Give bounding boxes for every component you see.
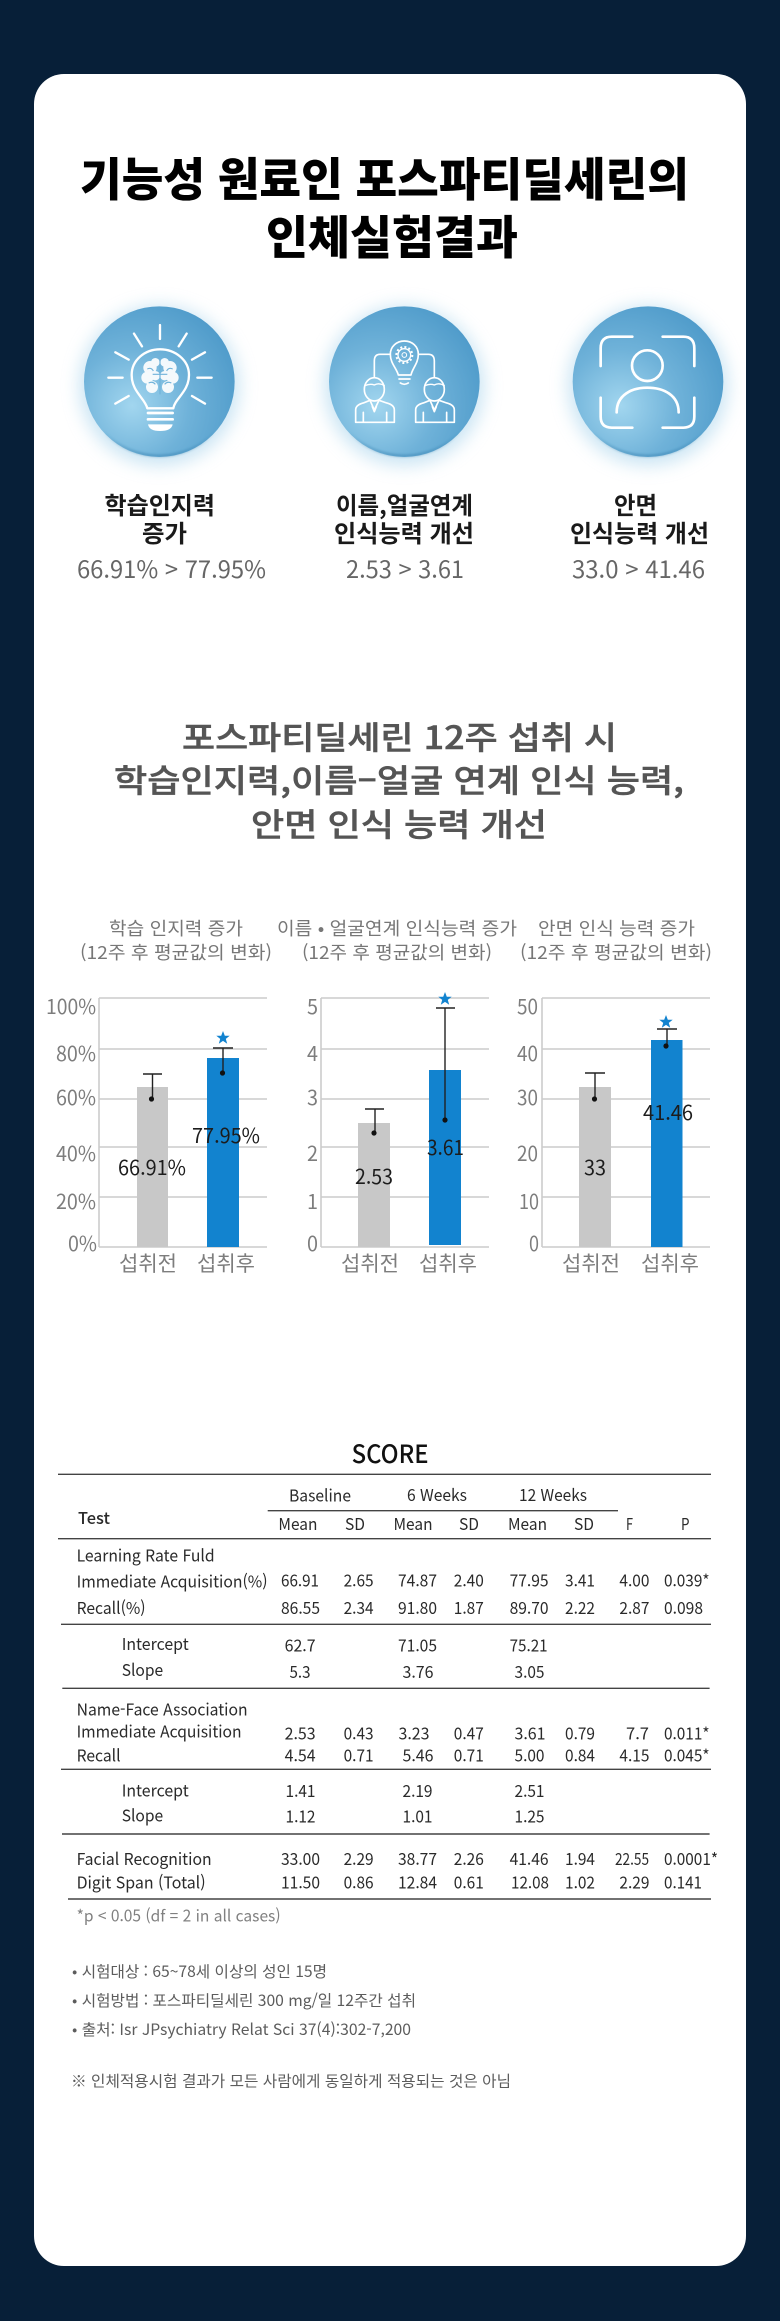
section: name-face association: 0.71 [454,1743,484,1767]
y axis labels [517,990,539,1257]
y axis labels: 20% [56,1185,96,1215]
chart caption: 학습 인지력 증가 [109,915,243,941]
section: name-face association: 0.011* [664,1720,710,1744]
section: name-face association: 2.19 [402,1778,432,1802]
section: name-face association: 0.79 [565,1720,595,1744]
table header: F [626,1511,633,1535]
label: learning cognition: 증가 [142,514,187,549]
section: learning rate: Slope [122,1657,163,1681]
y axis labels: 0% [68,1227,97,1257]
section: learning rate: 1.87 [454,1595,484,1619]
section: name-face association: 0.47 [454,1720,484,1744]
chart: facial recognition [517,915,712,1278]
section: name-face association: 3.23 [398,1720,430,1744]
section: facial recognition and digit span: 1.94 [565,1846,595,1870]
x axis labels: 섭취후 [197,1248,255,1278]
label: facial recognition [570,486,709,585]
section: name-face association: 0.71 [344,1743,374,1767]
section: name-face association: 1.01 [402,1804,432,1828]
value labels: 41.46 [643,1096,693,1126]
y axis labels [46,990,97,1257]
section heading: 학습인지력,이름–얼굴 연계 인식 능력, [114,756,684,802]
section: facial recognition and digit span: 11.50 [281,1869,320,1893]
icon: face recognition frame [568,306,728,466]
label: learning cognition: 학습인지력 [104,486,215,521]
table header: P [681,1511,690,1535]
section: learning rate: Intercept [122,1631,189,1655]
y axis labels [307,990,318,1257]
x axis labels: 섭취전 [562,1248,620,1278]
section: name-face association: Slope [122,1803,163,1827]
section: learning rate: 5.3 [290,1659,310,1683]
y axis labels: 3 [307,1081,318,1111]
section: facial recognition and digit span: 2.29 [619,1869,649,1893]
section: name-face association: Recall [77,1743,121,1767]
label: name-face association: 이름,얼굴연계 [336,486,473,521]
title [80,144,689,268]
bar: before [579,1087,611,1247]
y axis labels: 60% [56,1081,96,1111]
section: learning rate: 62.7 [285,1633,316,1657]
label: facial recognition: 33.0 > 41.46 [572,550,705,585]
section: name-face association: Intercept [122,1778,189,1802]
label: learning cognition [77,486,266,585]
section: learning rate: 71.05 [398,1633,437,1657]
section: name-face association: 4.15 [619,1743,649,1767]
section: name-face association: 0.43 [344,1720,374,1744]
table header: Mean [278,1511,317,1535]
section: facial recognition and digit span: 12.08 [511,1869,549,1893]
section: name-face association: 0.045* [664,1743,710,1767]
table header: SD [345,1511,365,1535]
section: facial recognition and digit span: 33.00 [281,1846,320,1870]
value labels: 66.91% [118,1151,186,1181]
section: learning rate: 3.41 [565,1568,595,1592]
section: learning rate: 75.21 [510,1633,548,1657]
section: name-face association: 0.84 [565,1743,595,1767]
chart caption: (12주 후 평균값의 변화) [302,939,492,965]
section: learning rate: Learning Rate Fuld [77,1543,215,1567]
x axis labels: 섭취전 [119,1248,177,1278]
section: learning rate: 2.87 [619,1595,649,1619]
section: learning rate: 74.87 [398,1568,437,1592]
value labels: 77.95% [192,1119,260,1149]
x axis labels: 섭취전 [341,1248,399,1278]
section: learning rate: 2.34 [344,1595,374,1619]
section heading: 포스파티딜세린 12주 섭취 시 [182,713,617,759]
section: facial recognition and digit span: 1.02 [565,1869,595,1893]
table header [78,1482,690,1535]
section: facial recognition and digit span: 22.55 [615,1846,649,1870]
y axis labels: 4 [307,1037,318,1067]
bar: before [137,1087,168,1247]
x axis labels [119,1248,255,1278]
section: name-face association: 2.51 [514,1778,544,1802]
x axis labels: 섭취후 [419,1248,477,1278]
bar: before [358,1123,390,1247]
error bars [365,1008,455,1136]
section: name-face association: Immediate Acquisition [77,1718,242,1742]
chart caption: (12주 후 평균값의 변화) [80,939,272,965]
section: name-face association: 1.25 [514,1804,544,1828]
y axis labels: 0 [307,1227,318,1257]
section: facial recognition and digit span [77,1846,718,1893]
table header: Test [78,1505,110,1529]
star: significance [659,1015,673,1028]
title: 기능성 원료인 포스파티딜세린의 [80,144,689,210]
x axis labels [562,1248,699,1278]
y axis labels: 1 [307,1185,318,1215]
value labels: 3.61 [427,1131,464,1161]
section: learning rate: Recall(%) [77,1595,146,1619]
y axis labels: 100% [46,990,96,1020]
table header: Mean [508,1511,547,1535]
section: name-face association: 2.53 [285,1720,316,1744]
section: learning rate: 2.22 [565,1595,595,1619]
error bars [143,1048,233,1102]
chart caption: 이름 • 얼굴연계 인식능력 증가 [277,915,517,941]
section: learning rate: 0.098 [664,1595,703,1619]
section: learning rate: 2.65 [344,1568,374,1592]
section: learning rate: 89.70 [510,1595,549,1619]
y axis labels: 2 [307,1137,318,1167]
section: learning rate: 66.91 [281,1568,319,1592]
star: significance [438,992,452,1005]
chart caption: (12주 후 평균값의 변화) [520,939,712,965]
chart caption: 안면 인식 능력 증가 [538,915,695,941]
section: learning rate: 0.039* [664,1568,710,1592]
table header: SD [459,1511,479,1535]
section: name-face association: 5.46 [402,1743,434,1767]
table header: SD [574,1511,594,1535]
bar: after [651,1040,682,1247]
label: name-face association: 2.53 > 3.61 [346,550,464,585]
y axis labels: 50 [517,990,538,1020]
section: name-face association: 1.12 [286,1804,316,1828]
label: facial recognition: 안면 [614,486,657,521]
study notes: • 시험방법 : 포스파티딜세린 300 mg/일 12주간 섭취 [72,1989,416,2011]
label: facial recognition: 인식능력 개선 [570,514,709,549]
x axis labels [341,1248,477,1278]
section heading [114,713,684,846]
chart caption [80,915,272,965]
star: significance [216,1031,230,1044]
y axis labels: 30 [517,1081,538,1111]
label: name-face association [334,486,474,585]
table footnote: *p < 0.05 (df = 2 in all cases) [77,1903,281,1927]
y axis labels: 40% [56,1137,96,1167]
study notes: • 시험대상 : 65~78세 이상의 성인 15명 [72,1960,327,1982]
section: learning rate: 2.40 [454,1568,484,1592]
section: facial recognition and digit span: 0.61 [454,1869,484,1893]
section: facial recognition and digit span: 2.29 [344,1846,374,1870]
section: name-face association: 1.41 [286,1778,316,1802]
section: learning rate: 77.95 [510,1568,549,1592]
section: learning rate: 91.80 [398,1595,437,1619]
icon: two people linked by idea bulb [324,306,484,466]
section: learning rate: 3.76 [402,1659,434,1683]
icon: light bulb with brain [79,306,239,466]
section: name-face association [77,1697,710,1828]
disclaimer: ※ 인체적용시험 결과가 모든 사람에게 동일하게 적용되는 것은 아님 [71,2070,511,2092]
chart caption [277,915,517,965]
section: learning rate: 86.55 [281,1595,320,1619]
section: facial recognition and digit span: 0.0001* [664,1846,718,1870]
section: facial recognition and digit span: 12.84 [398,1869,437,1893]
label: name-face association: 인식능력 개선 [334,514,474,549]
section: name-face association: 3.61 [514,1720,546,1744]
error bars [585,1029,677,1102]
table header: 12 Weeks [519,1482,587,1506]
section: name-face association: Name-Face Association [77,1697,248,1721]
table header: 6 Weeks [407,1482,467,1506]
chart caption [520,915,712,965]
y axis labels: 10 [519,1185,539,1215]
bar: after [429,1070,461,1245]
label: learning cognition: 66.91% > 77.95% [77,550,266,585]
section: learning rate: Immediate Acquisition(%) [77,1569,268,1593]
section: facial recognition and digit span: Digit Span (Total) [77,1869,206,1893]
section heading: 안면 인식 능력 개선 [251,800,547,846]
section: name-face association: 5.00 [514,1743,544,1767]
section: facial recognition and digit span: Facial Recognition [77,1846,212,1870]
value labels: 33 [584,1151,606,1181]
section: learning rate [77,1543,710,1683]
section: facial recognition and digit span: 38.77 [398,1846,437,1870]
chart: learning cognition [46,915,272,1278]
section: facial recognition and digit span: 0.141 [664,1869,702,1893]
section: learning rate: 3.05 [514,1659,544,1683]
score table heading: SCORE [352,1435,429,1471]
y axis labels: 40 [517,1037,538,1067]
section: facial recognition and digit span: 0.86 [344,1869,374,1893]
y axis labels: 20 [517,1137,538,1167]
section: facial recognition and digit span: 2.26 [454,1846,484,1870]
section: name-face association: 4.54 [285,1743,316,1767]
value labels [355,1131,464,1190]
study notes [72,1960,416,2040]
y axis labels: 80% [56,1037,96,1067]
y axis labels: 5 [307,990,318,1020]
table header: Baseline [289,1483,351,1507]
y axis labels: 0 [529,1227,539,1257]
section: name-face association: 7.7 [626,1720,649,1744]
section: learning rate: 4.00 [619,1568,649,1592]
title: 인체실험결과 [266,202,518,268]
study notes: • 출처: Isr JPsychiatry Relat Sci 37(4):302-7,200 [72,2018,411,2040]
value labels: 2.53 [355,1160,393,1190]
bar: after [207,1058,239,1247]
score table [58,1474,718,1899]
table header: Mean [394,1511,432,1535]
x axis labels: 섭취후 [641,1248,699,1278]
value labels [118,1119,260,1181]
chart: name-face association [277,915,517,1278]
section: facial recognition and digit span: 41.46 [510,1846,549,1870]
value labels [584,1096,693,1181]
